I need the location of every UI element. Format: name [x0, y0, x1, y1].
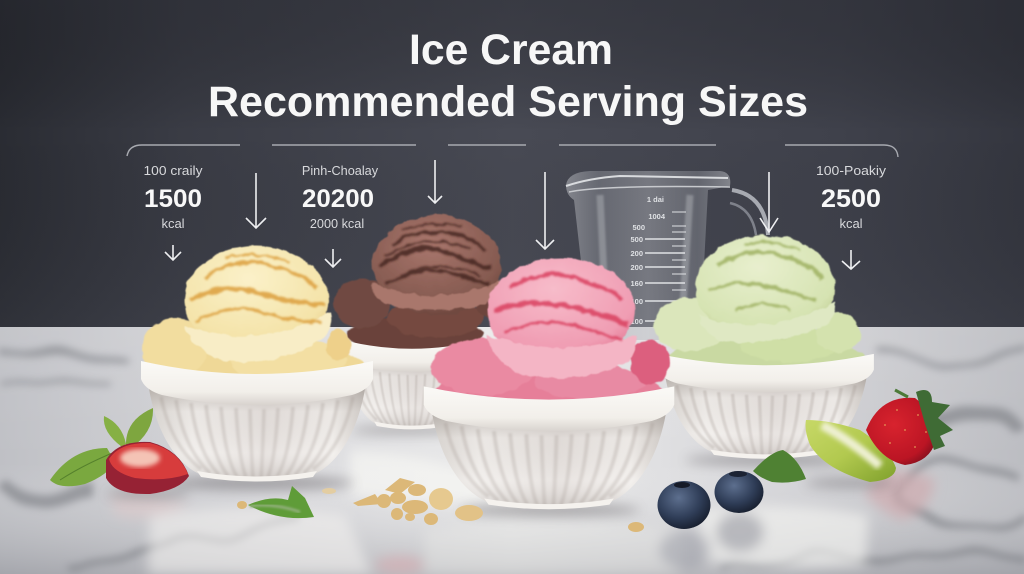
reflections of bowls on counter: [110, 450, 935, 574]
label: pistachio serving: 2500: [821, 185, 881, 213]
title: [208, 26, 808, 126]
measuring cup: 100: [630, 317, 643, 326]
label: pistachio serving: [816, 164, 887, 231]
label: vanilla serving: [144, 163, 203, 231]
measuring cup: 160: [630, 279, 643, 288]
green fruit slice: [806, 420, 896, 482]
label: vanilla serving: 100 craily: [144, 163, 203, 178]
mint sprig: [50, 408, 153, 486]
chocolate scoops: [334, 215, 501, 353]
peanuts: [237, 478, 644, 532]
blueberries: [658, 471, 764, 529]
small green leaf: [753, 450, 806, 483]
label: chocolate serving: 20200: [302, 185, 374, 213]
measuring cup: 200: [630, 249, 643, 258]
title: Recommended Serving Sizes: [208, 78, 808, 126]
whole strawberry: [866, 390, 953, 465]
pistachio arrow: [760, 172, 778, 232]
measuring cup: 1004: [648, 212, 666, 221]
marble counter: [0, 327, 1024, 574]
pink scoops: [431, 258, 670, 414]
strawberry half: [106, 442, 189, 494]
arrows: [165, 160, 860, 269]
mint leaf: [248, 486, 314, 518]
green scoops: [654, 235, 866, 382]
bowl: yellow: [141, 361, 373, 482]
bowl: chocolate: [339, 339, 485, 429]
label: chocolate serving: Pinh-Choalay: [302, 164, 379, 178]
label: pistachio serving: 100-Poakiy: [816, 164, 887, 178]
background wall: [0, 0, 1024, 328]
bracket divider lines: [127, 145, 898, 157]
bowl and fruit contact shadows: [106, 426, 895, 516]
measuring cup: 200: [630, 263, 643, 272]
label: chocolate serving: [302, 164, 379, 231]
title: Ice Cream: [409, 26, 613, 74]
measuring cup: 1 dai: [647, 195, 664, 204]
measuring cup: [566, 171, 768, 340]
measuring cup: 100: [630, 297, 643, 306]
label: vanilla serving: 1500: [144, 185, 202, 213]
yellow scoops: [142, 246, 365, 392]
bowl: pink: [424, 386, 674, 509]
label: chocolate serving: 2000 kcal: [310, 217, 364, 231]
label: pistachio serving: kcal: [839, 216, 863, 231]
label: vanilla serving: kcal: [161, 216, 185, 231]
measuring cup: 500: [632, 223, 645, 232]
bowl: green: [658, 354, 874, 459]
measuring cup: 500: [630, 235, 643, 244]
